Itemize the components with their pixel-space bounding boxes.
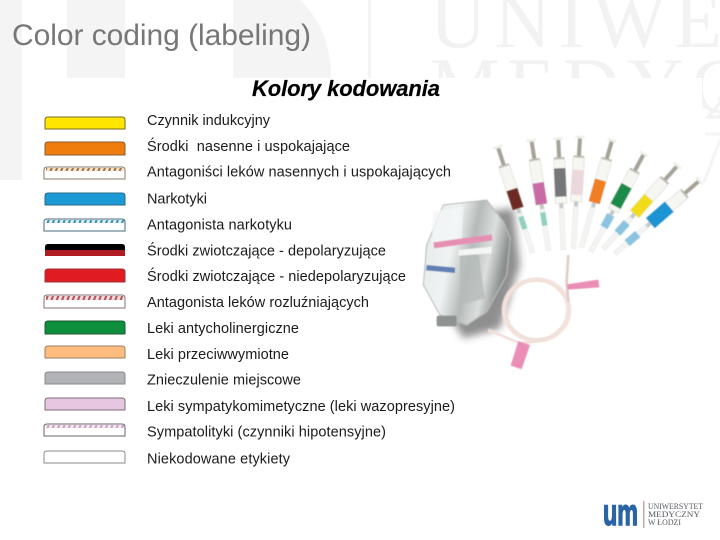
legend row: uncoded white xyxy=(44,451,291,468)
logo: Uniwersytet Medyczny w Łodzi: W ŁODZI xyxy=(648,517,681,527)
legend row: mauve hatched xyxy=(44,424,386,440)
legend row: orange hatched: Antagoniści leków nasennych i uspokajających xyxy=(147,164,451,180)
logo: Uniwersytet Medyczny w Łodzi: UNIWERSYTET xyxy=(648,501,704,511)
legend row: blue hatched xyxy=(44,218,292,234)
legend row: orange: Środki nasenne i uspokajające xyxy=(147,137,350,155)
legend row: black and red xyxy=(45,242,386,260)
coiled tube with tags xyxy=(488,255,599,369)
legend row: red hatched: Antagonista leków rozluźniających xyxy=(147,295,369,311)
legend row: red xyxy=(45,267,406,285)
photo: syringes, infusion bag and tube xyxy=(423,135,705,369)
legend row: blue: Narkotyki xyxy=(147,192,207,208)
infusion bag xyxy=(423,200,520,338)
legend row: uncoded white: Niekodowane etykiety xyxy=(147,452,291,468)
legend row: salmon xyxy=(45,346,289,363)
legend row: mauve hatched: Sympatolityki (czynniki hipotensyjne) xyxy=(147,424,386,440)
legend row: blue xyxy=(45,192,207,208)
syringe fan xyxy=(492,135,705,259)
heading: Kolory kodowania: Kolory kodowania xyxy=(252,76,440,101)
legend row: gray xyxy=(45,372,301,388)
logo: Uniwersytet Medyczny w Łodzi xyxy=(603,492,704,533)
legend row: black and red: Środki zwiotczające - depolaryzujące xyxy=(147,242,386,260)
title: Color coding (labeling) xyxy=(12,19,311,52)
background watermark xyxy=(0,0,720,188)
legend row: blue hatched: Antagonista narkotyku xyxy=(147,218,292,234)
legend row: red: Środki zwiotczające - niedepolaryzujące xyxy=(147,267,406,285)
legend row: mauve: Leki sympatykomimetyczne (leki wazopresyjne) xyxy=(147,399,455,415)
logo: Uniwersytet Medyczny w Łodzi: um xyxy=(603,492,638,533)
legend row: green xyxy=(45,321,299,337)
legend row: yellow xyxy=(45,113,271,129)
legend row: yellow: Czynnik indukcyjny xyxy=(147,113,271,129)
legend row: red hatched xyxy=(44,295,369,311)
legend row: orange xyxy=(45,137,350,155)
legend row: green: Leki antycholinergiczne xyxy=(147,321,299,337)
logo: Uniwersytet Medyczny w Łodzi: MEDYCZNY xyxy=(648,509,700,519)
legend row: salmon: Leki przeciwwymiotne xyxy=(147,347,289,363)
legend xyxy=(44,113,455,468)
legend row: gray: Znieczulenie miejscowe xyxy=(147,372,301,388)
